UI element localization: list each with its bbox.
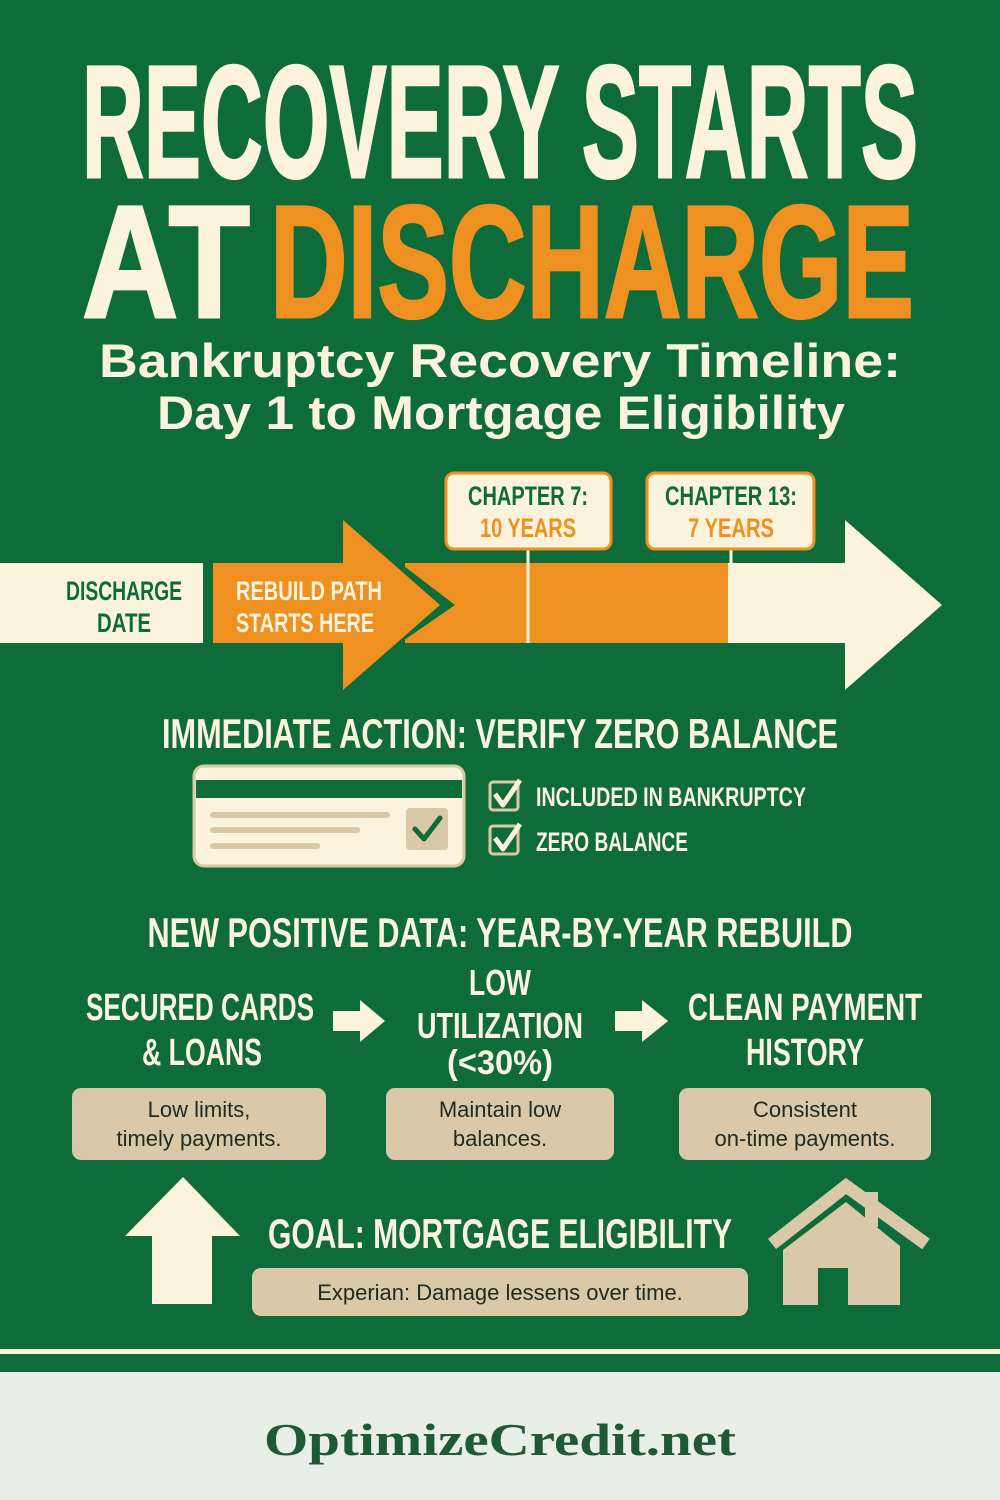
- discharge date block: DISCHARGE: [66, 576, 182, 606]
- goal note box: [252, 1268, 748, 1316]
- column: secured cards: SECURED CARDS: [86, 987, 314, 1029]
- icon: statement card: [194, 766, 464, 866]
- column: low utilization: [386, 962, 614, 1160]
- column: secured cards: Low limits,: [148, 1097, 250, 1122]
- rebuild path arrow: REBUILD PATH: [236, 576, 382, 606]
- column: clean payment history: Consistent: [753, 1097, 857, 1122]
- title: [82, 32, 918, 351]
- icon: up arrow: [125, 1177, 240, 1304]
- callout: chapter 7: [446, 473, 611, 549]
- goal note box: Experian: Damage lessens over time.: [317, 1280, 683, 1305]
- column: clean payment history: HISTORY: [746, 1032, 864, 1074]
- arrow 2: [615, 1000, 668, 1042]
- goal heading: GOAL: MORTGAGE ELIGIBILITY: [268, 1210, 732, 1257]
- callout: chapter 7: 10 YEARS: [480, 513, 576, 543]
- column: low utilization: Maintain low: [439, 1097, 561, 1122]
- column: low utilization: (<30%): [447, 1044, 553, 1082]
- column: clean payment history: on-time payments.: [715, 1126, 895, 1151]
- column: secured cards: [72, 987, 326, 1160]
- arrow 1: [333, 1000, 385, 1042]
- checklist: [490, 780, 806, 857]
- checklist: INCLUDED IN BANKRUPTCY: [536, 782, 806, 812]
- column: low utilization: balances.: [453, 1126, 547, 1151]
- column: secured cards: timely payments.: [116, 1126, 282, 1151]
- discharge date block: DATE: [97, 608, 151, 638]
- cream future arrow: [728, 520, 942, 690]
- column: clean payment history: [679, 987, 931, 1160]
- column: low utilization: LOW: [469, 962, 531, 1003]
- footer: [0, 1372, 1000, 1500]
- callout: chapter 13: CHAPTER 13:: [665, 481, 797, 511]
- subtitle: Bankruptcy Recovery Timeline:: [99, 334, 901, 387]
- icon: house: [772, 1186, 926, 1305]
- footer: OptimizeCredit.net: [264, 1414, 737, 1465]
- title: AT: [82, 172, 250, 351]
- callout: chapter 13: 7 YEARS: [688, 513, 774, 543]
- timeline: [0, 473, 942, 690]
- orange timeline bar: [405, 563, 728, 643]
- rebuild path arrow: [213, 520, 455, 690]
- callout: chapter 7: CHAPTER 7:: [468, 481, 588, 511]
- checklist: ZERO BALANCE: [536, 827, 688, 857]
- rebuild path arrow: STARTS HERE: [236, 608, 374, 638]
- subtitle: [99, 334, 901, 439]
- discharge date block: [0, 563, 203, 643]
- subtitle: Day 1 to Mortgage Eligibility: [157, 386, 845, 439]
- column: secured cards: & LOANS: [142, 1032, 262, 1074]
- column: low utilization: UTILIZATION: [417, 1005, 583, 1046]
- column: clean payment history: CLEAN PAYMENT: [688, 987, 922, 1029]
- callout: chapter 13: [647, 473, 814, 549]
